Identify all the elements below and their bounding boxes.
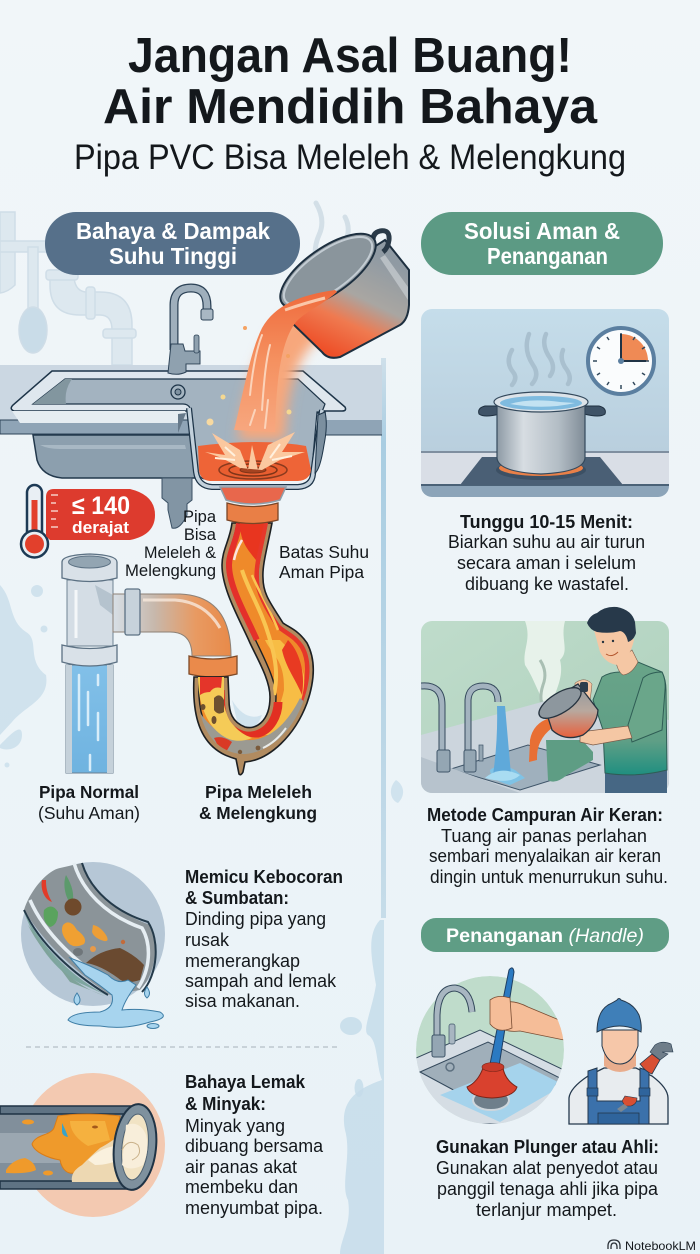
counter (421, 697, 669, 793)
steam wisps (315, 203, 348, 280)
cap (597, 998, 641, 1032)
label: batas suhu (279, 542, 369, 582)
title (74, 29, 626, 177)
front faucet (468, 686, 498, 755)
copper collar (189, 656, 237, 677)
top cap (62, 554, 117, 582)
icon: leaking clogged pipe (21, 862, 165, 1028)
divider lip (12, 411, 186, 430)
torso (569, 1068, 668, 1124)
label: pipa normal: (Suhu Aman) (38, 803, 140, 823)
heading pill: Bahaya & Dampak: Suhu Tinggi (109, 243, 237, 269)
label: pipa meleleh: & Melengkung (199, 803, 317, 823)
text block: memicu kebocoran: sisa makanan. (185, 991, 300, 1011)
water column (66, 665, 113, 773)
left basin outside (33, 435, 195, 478)
illustration: sink with faucet (0, 288, 382, 528)
illustration: normal PVC pipe (62, 554, 237, 773)
text block: memicu kebocoran: sampah and lemak (185, 971, 337, 991)
counter front (0, 420, 190, 434)
text block: gunakan plunger: terlanjur mampet. (476, 1200, 617, 1220)
pot (544, 684, 598, 738)
text block: bahaya lemak: air panas akat (185, 1157, 297, 1177)
icon: thermometer (21, 485, 48, 558)
neck (616, 650, 638, 675)
text block: memicu kebocoran: Memicu Kebocoran (185, 866, 343, 887)
watermark: NotebookLM: NotebookLM (625, 1239, 696, 1253)
neck and face (604, 1050, 636, 1072)
pot body (285, 240, 409, 358)
vertical divider (381, 358, 386, 918)
sparks (206, 326, 292, 426)
steam (509, 334, 570, 385)
pour stream (234, 290, 337, 432)
basin interior (33, 379, 325, 479)
text block: bahaya lemak: dibuang bersama (185, 1136, 324, 1156)
text block: bahaya lemak: membeku dan (185, 1177, 298, 1197)
text block: gunakan plunger: Gunakan Plunger atau Ahli: (436, 1137, 659, 1157)
label: pipa normal (38, 782, 140, 823)
face (594, 626, 634, 665)
text block: gunakan plunger: Gunakan alat penyedot atau (436, 1158, 658, 1178)
hot water pour (529, 718, 552, 762)
label: pipa normal: Pipa Normal (39, 782, 139, 802)
text block: tunggu: Tunggu 10-15 Menit: (460, 511, 633, 532)
gray sludge band at bottom of U (200, 698, 304, 754)
text block: tunggu (448, 511, 645, 594)
illustration: hot water in basin and splash (198, 432, 311, 481)
arm (505, 1001, 564, 1040)
heading pill: Penanganan: Penanganan (Handle) (446, 925, 644, 947)
panel: man mixing with tap water (421, 607, 669, 793)
funnel (220, 487, 286, 504)
background watery blobs (0, 585, 403, 1254)
tee body (67, 580, 113, 646)
sleeve (628, 672, 665, 742)
text block: metode (427, 805, 668, 887)
back faucet (421, 686, 442, 750)
icon: plunger in sink (416, 968, 564, 1124)
shirt (593, 662, 667, 775)
label: pipa bisa meleleh: Pipa (183, 508, 217, 526)
icon: grease clogged pipe (0, 1073, 165, 1217)
counter top (0, 365, 382, 420)
man (534, 607, 667, 793)
text block: metode: dingin untuk menurrukun suhu. (430, 867, 668, 887)
title: Jangan Asal Buang! (128, 29, 572, 83)
heading pill: Penanganan (421, 918, 669, 952)
label: pipa meleleh: Pipa Meleleh (205, 782, 312, 802)
plunger cup (467, 1064, 517, 1098)
text block: bahaya lemak: & Minyak: (185, 1093, 266, 1114)
label: pipa bisa meleleh: Bisa (184, 526, 217, 544)
flames clipped to inner pipe (198, 523, 310, 754)
drain stub under left basin (162, 478, 192, 528)
text block: tunggu: secara aman i selelum (457, 553, 636, 573)
faucet (437, 988, 472, 1055)
pipe outer wall (194, 523, 313, 775)
text block: metode: sembari menyalaikan air keran (429, 846, 661, 866)
callout: 140 degree limit: ≤ 140 (72, 492, 130, 520)
heading pill: Solusi Aman: Solusi Aman & (464, 218, 620, 244)
heading pill: Bahaya & Dampak (45, 212, 300, 275)
pot body (497, 405, 585, 474)
pocket tool (622, 1096, 637, 1106)
label: pipa bisa meleleh: Meleleh & (144, 544, 216, 562)
text block: metode: Metode Campuran Air Keran: (427, 805, 663, 825)
icon: plumber (569, 998, 673, 1124)
text block: memicu kebocoran: memerangkap (185, 951, 300, 971)
label: pipa bisa meleleh: Melengkung (125, 562, 216, 580)
lower collar (62, 645, 117, 666)
sludge (86, 948, 144, 982)
pot inside rim (269, 220, 387, 322)
stove (460, 457, 623, 485)
text block: bahaya lemak: menyumbat pipa. (185, 1198, 323, 1218)
yellow grease in left tube (198, 677, 252, 741)
text block: gunakan plunger: panggil tenaga ahli jika pipa (437, 1179, 659, 1199)
background ghost plumbing (0, 212, 136, 365)
orange glow (238, 292, 340, 440)
text block: memicu kebocoran: Dinding pipa yang (185, 909, 326, 929)
title: Pipa PVC Bisa Meleleh & Melengkung (74, 138, 626, 177)
green box (546, 740, 593, 782)
title: Air Mendidih Bahaya (103, 80, 598, 134)
overalls (588, 1068, 649, 1124)
clock (588, 328, 654, 394)
top flange (227, 503, 278, 524)
heading pill: Solusi Aman: Penanganan (487, 243, 608, 269)
hand (490, 996, 512, 1030)
callout: 140 degree limit: derajat (72, 519, 130, 537)
wrench (640, 1054, 660, 1074)
pants (605, 770, 667, 793)
label: batas suhu: Aman Pipa (279, 562, 364, 582)
plunger handle (490, 968, 514, 1066)
text block: bahaya lemak: Minyak yang (185, 1116, 285, 1136)
text block: metode: Tuang air panas perlahan (441, 826, 647, 846)
text block: memicu kebocoran: & Sumbatan: (185, 887, 289, 908)
label: batas suhu: Batas Suhu (279, 542, 369, 562)
food waste (42, 880, 52, 902)
text block: bahaya lemak (185, 1071, 324, 1218)
text block: bahaya lemak: Bahaya Lemak (185, 1071, 306, 1092)
pipe inner wall: note the inner edge of the loop sits outside the outer-wall cut-out (199, 523, 309, 753)
text block: memicu kebocoran (185, 866, 343, 1011)
pot handle (373, 231, 389, 252)
horizontal and elbow (113, 594, 231, 656)
tap water stream (493, 706, 511, 775)
hair (587, 607, 636, 642)
sink rim (11, 371, 346, 413)
text block: tunggu: Biarkan suhu au air turun (448, 532, 645, 552)
text block: memicu kebocoran: rusak (185, 930, 230, 950)
water leak (68, 958, 163, 1027)
overflow ring (171, 385, 185, 399)
callout: 140 degree limit (46, 489, 155, 540)
pot handles (479, 406, 500, 416)
right basin frame (189, 408, 322, 487)
label: pipa bisa meleleh (125, 508, 217, 580)
heading pill: Solusi Aman (421, 212, 663, 275)
side collar (125, 589, 140, 635)
heading pill: Bahaya & Dampak: Bahaya & Dampak (76, 218, 270, 244)
text block: gunakan plunger (436, 1137, 659, 1220)
illustration: melted bent pipe (192, 486, 314, 776)
text block: tunggu: dibuang ke wastafel. (465, 574, 629, 594)
faucet (174, 288, 207, 350)
illustration: boiling water pouring from pot (206, 203, 409, 440)
white steam (524, 621, 565, 702)
label: pipa meleleh (199, 782, 317, 823)
panel: cooling pot with clock (421, 309, 669, 497)
forearm and hands (580, 726, 632, 745)
